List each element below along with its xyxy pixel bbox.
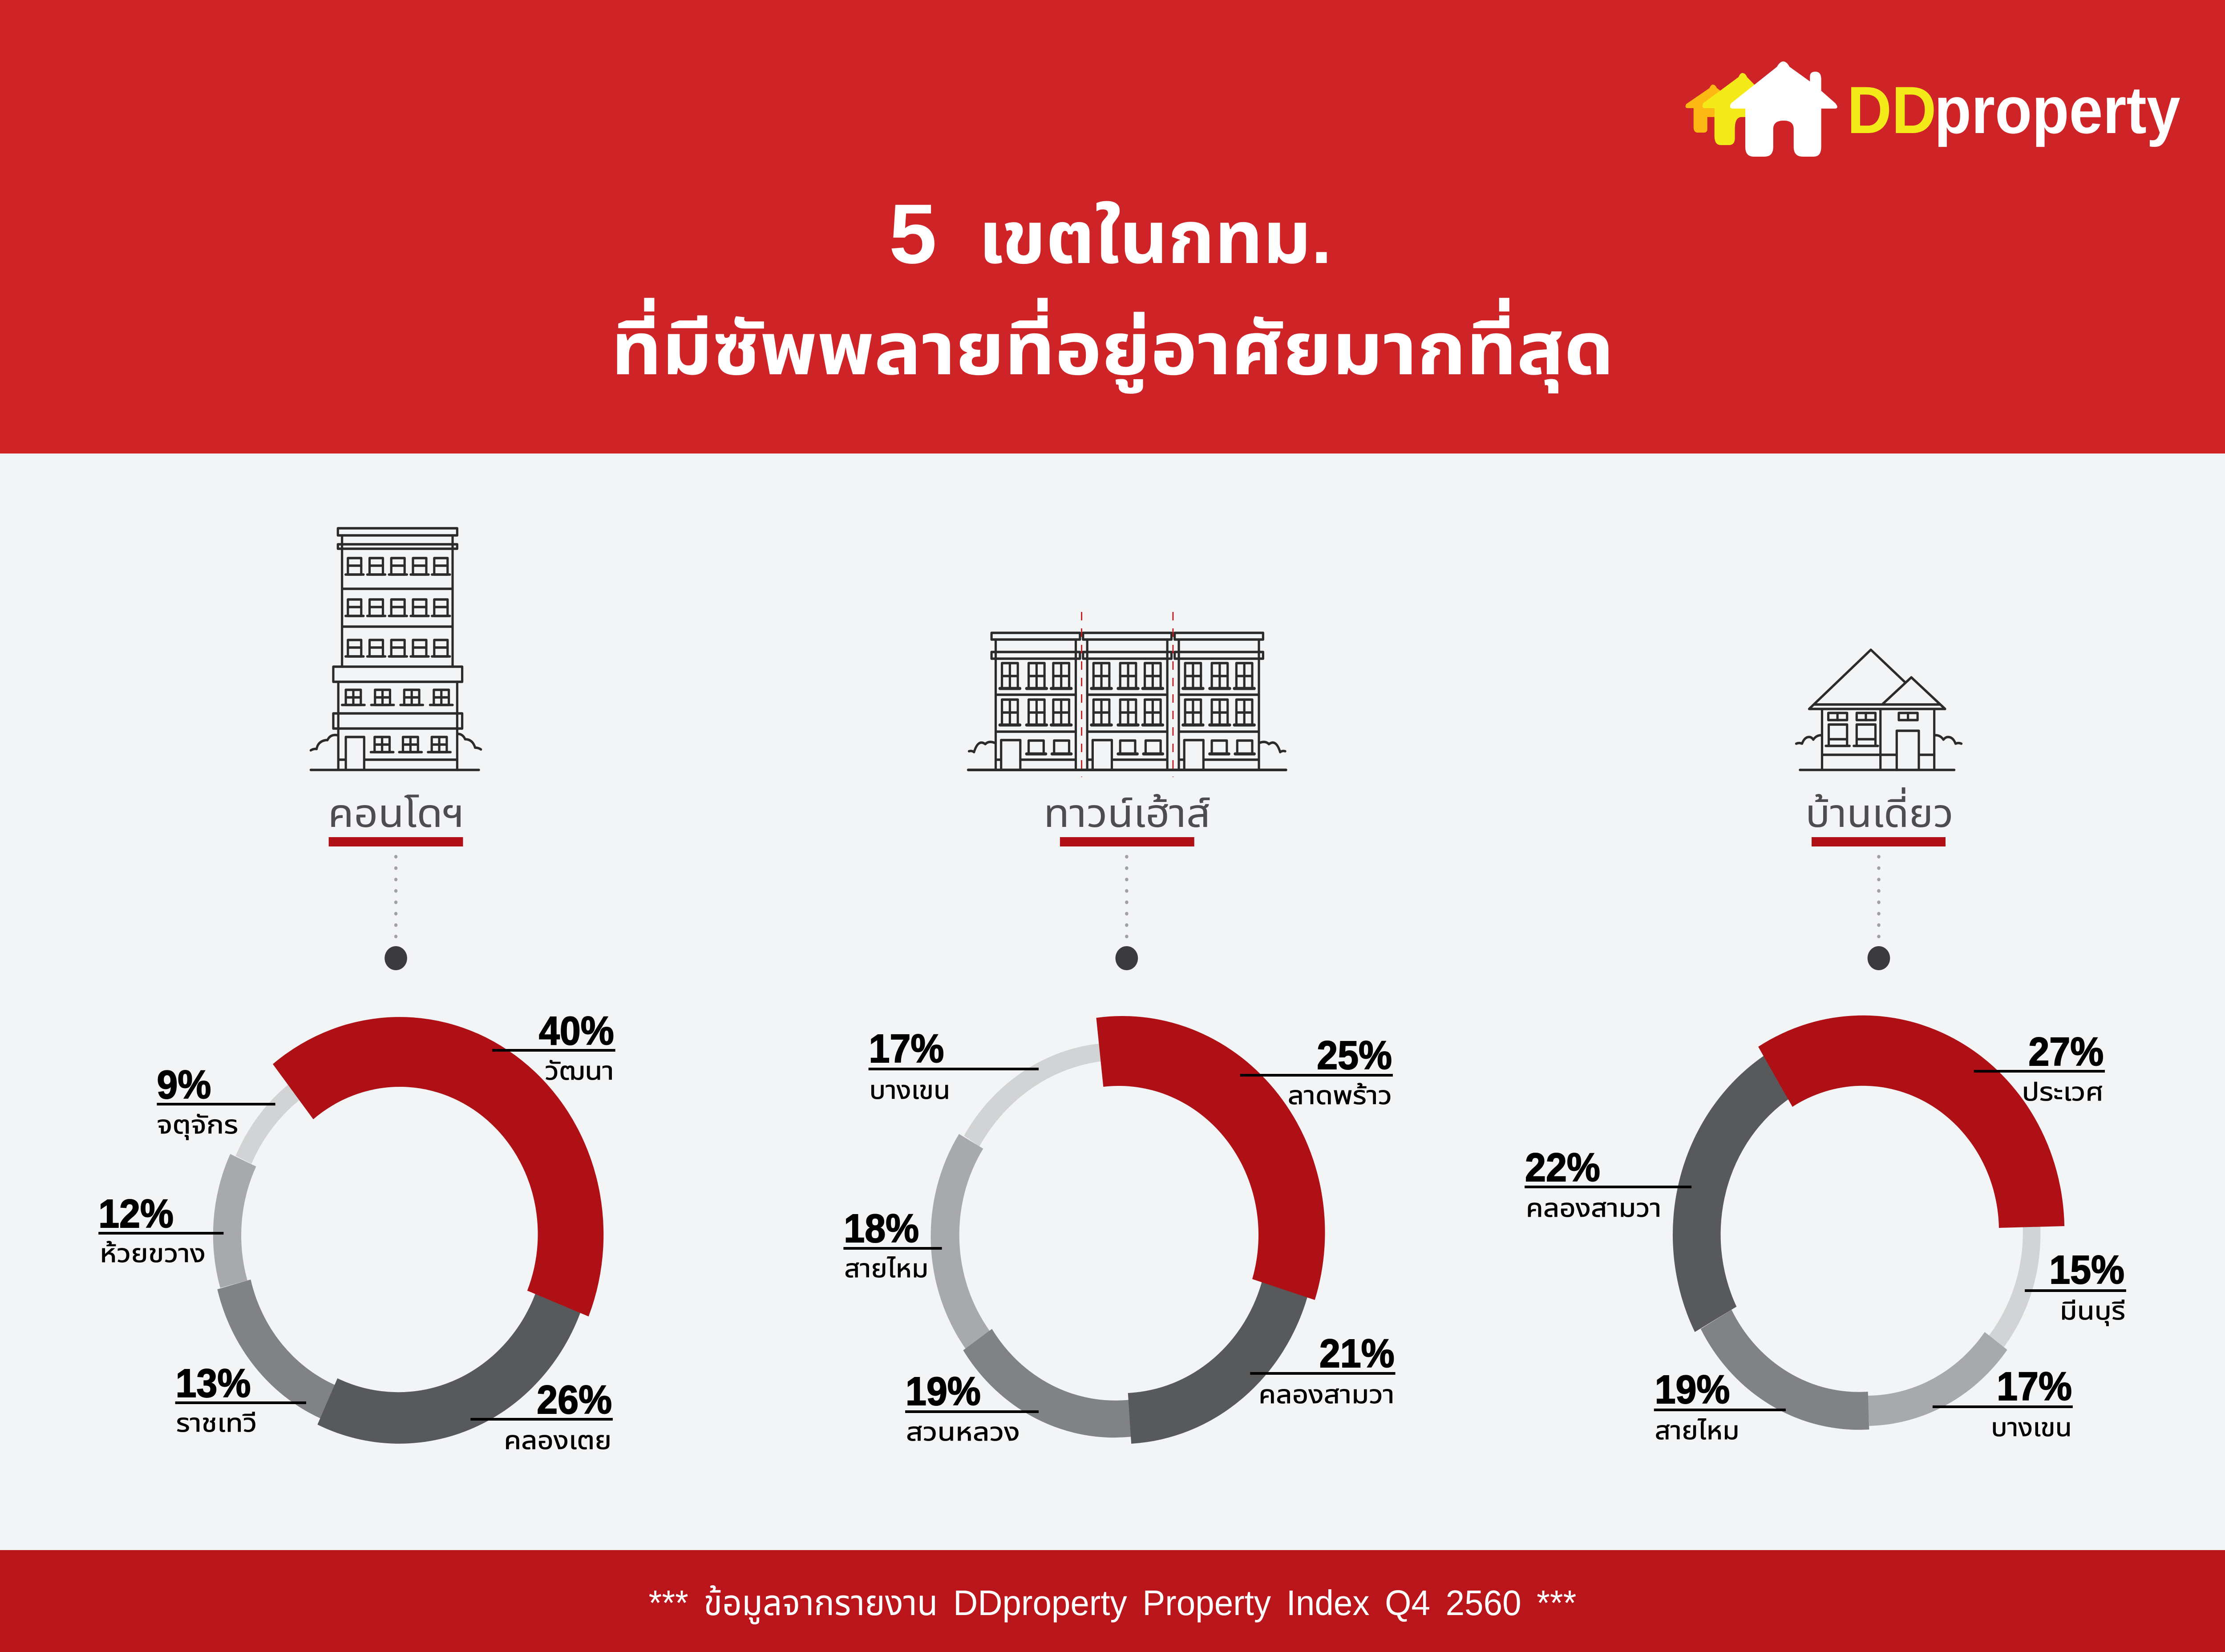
connector dot (1116, 946, 1138, 970)
label: Watthana 40%: 40% (539, 1009, 614, 1053)
label: Min Buri 15%: มีนบุรี (2060, 1297, 2125, 1326)
donut chart: townhouse (931, 1016, 1325, 1444)
heading: townhouse: ทาวน์เฮ้าส์ (1044, 792, 1210, 836)
label: Bang Khen 17%: 17% (1997, 1365, 2072, 1409)
heading underline (1060, 837, 1194, 846)
label: Bang Khen 17% (1933, 1365, 2073, 1441)
dotted connector (1877, 857, 1881, 939)
label: Ratchathewi 13% (175, 1361, 306, 1437)
heading underline (329, 837, 463, 846)
logo: DDproperty (1686, 61, 2180, 157)
label: Sai Mai 19% (1654, 1368, 1786, 1445)
heading: condo: คอนโดฯ (328, 792, 465, 836)
label: Chatuchak 9%: จตุจักร (157, 1111, 238, 1140)
label: Suan Luang 19% (905, 1369, 1039, 1446)
title line 2: ที่มีซัพพลายที่อยู่อาศัยมากที่สุด (611, 298, 1614, 394)
icon: orange house (1686, 85, 1744, 133)
label: Huai Khwang 12% (98, 1192, 223, 1267)
label: Lat Phrao 25%: 25% (1317, 1033, 1392, 1078)
label: Bang Khen 17%: บางเขน (870, 1076, 950, 1104)
label: Min Buri 15%: 15% (2049, 1248, 2124, 1292)
title line 1: 5 เขตในกทม. (889, 187, 1332, 281)
label: Khlong Sam Wa 22% (1525, 1146, 1691, 1222)
connector dot (384, 946, 407, 970)
label: Suan Luang 19%: สวนหลวง (906, 1418, 1020, 1446)
header band (0, 0, 2225, 453)
donut chart: detached house (1673, 1016, 2064, 1430)
label: Sai Mai 18% (843, 1207, 942, 1283)
label: Chatuchak 9%: 9% (157, 1063, 211, 1107)
label: Watthana 40% (492, 1009, 615, 1085)
panel: detached house (1525, 650, 2126, 1445)
title (611, 187, 1614, 394)
logo wordmark DD: DD (1847, 73, 1936, 147)
footer source note: *** ข้อมูลจากรายงาน DDproperty Property Index Q4 2560 *** (649, 1583, 1576, 1624)
heading underline (1812, 837, 1946, 846)
label: Bang Khen 17%: 17% (869, 1027, 944, 1071)
panel: townhouse (843, 612, 1396, 1446)
label: Khlong Toei 26% (470, 1378, 613, 1454)
dotted connector (394, 857, 398, 939)
logo wordmark property: property (1934, 73, 2180, 147)
footer band (0, 1550, 2225, 1652)
label: Khlong Sam Wa 21% (1250, 1332, 1396, 1409)
label: Khlong Sam Wa 22%: คลองสามวา (1526, 1194, 1662, 1222)
label: Khlong Toei 26%: คลองเตย (504, 1426, 611, 1454)
connector dot (1868, 946, 1890, 970)
label: Chatuchak 9% (157, 1063, 275, 1140)
label: Khlong Toei 26%: 26% (537, 1378, 612, 1422)
label: Khlong Sam Wa 21%: 21% (1319, 1332, 1395, 1376)
heading: detached house: บ้านเดี่ยว (1805, 787, 1954, 836)
label: Bang Khen 17% (869, 1027, 1039, 1104)
label: Sai Mai 18%: 18% (844, 1207, 919, 1251)
donut chart: condo (213, 1017, 603, 1444)
label: Sai Mai 19%: 19% (1655, 1368, 1730, 1412)
label: Prawet 27% (1974, 1030, 2105, 1106)
label: Prawet 27%: 27% (2028, 1030, 2104, 1074)
label: Khlong Sam Wa 22%: 22% (1525, 1146, 1600, 1190)
label: Lat Phrao 25% (1240, 1033, 1393, 1109)
label: Ratchathewi 13%: 13% (176, 1361, 251, 1406)
label: Suan Luang 19%: 19% (906, 1369, 981, 1414)
icon: white house (1730, 61, 1837, 157)
label: Huai Khwang 12%: ห้วยขวาง (100, 1239, 206, 1267)
label: Sai Mai 19%: สายไหม (1655, 1417, 1740, 1445)
label: Lat Phrao 25%: ลาดพร้าว (1288, 1081, 1392, 1109)
label: Sai Mai 18%: สายไหม (844, 1255, 929, 1283)
dotted connector (1125, 857, 1129, 939)
label: Prawet 27%: ประเวศ (2022, 1078, 2104, 1106)
panel: condo (98, 528, 615, 1454)
icon: condo building (311, 528, 481, 770)
icon: detached house (1796, 650, 1962, 770)
icon: yellow house (1703, 73, 1777, 145)
icon: townhouse row (968, 612, 1286, 777)
label: Min Buri 15% (2025, 1248, 2126, 1326)
label: Khlong Sam Wa 21%: คลองสามวา (1258, 1381, 1395, 1409)
label: Bang Khen 17%: บางเขน (1991, 1413, 2072, 1441)
label: Watthana 40%: วัฒนา (545, 1057, 614, 1085)
label: Huai Khwang 12%: 12% (98, 1192, 174, 1236)
label: Ratchathewi 13%: ราชเทวี (176, 1409, 257, 1437)
